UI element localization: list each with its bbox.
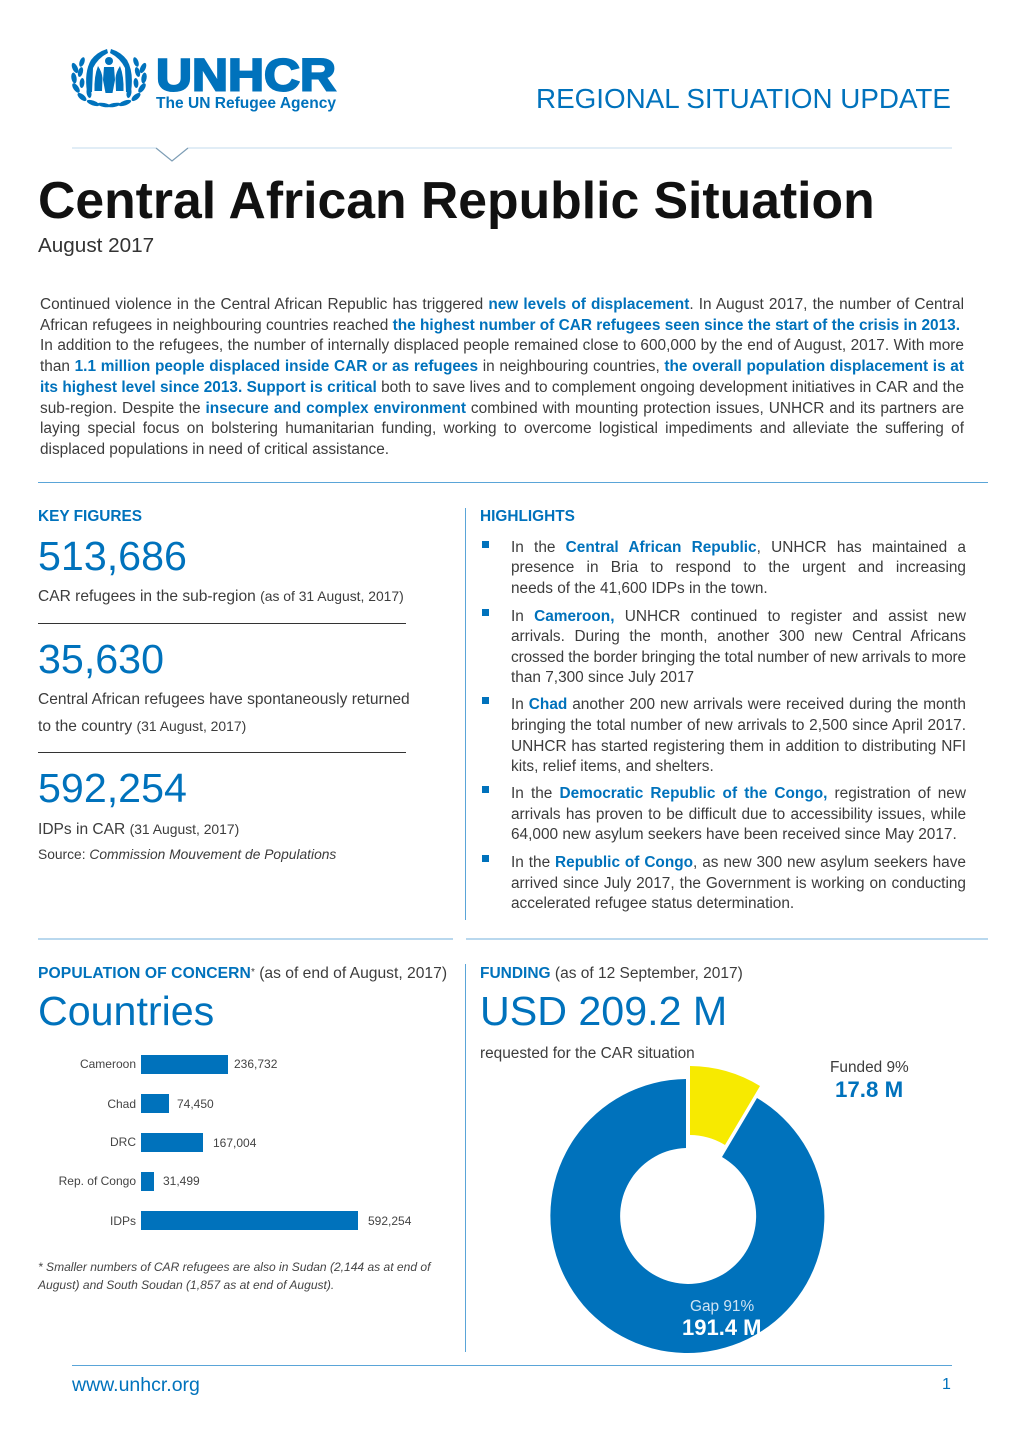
caption: refugees: CAR refugees in the sub-region (as of 31 August, 2017) xyxy=(38,588,404,605)
highlight: Republic of Congo xyxy=(511,854,966,912)
title: Central African Republic Situation xyxy=(38,171,875,229)
panel: key figures xyxy=(38,508,410,862)
document type label: REGIONAL SITUATION UPDATE xyxy=(536,83,951,114)
highlight: Central African Republic: In the Central African Republic, UNHCR has maintained a xyxy=(511,539,966,556)
intro paragraph: laying special focus on bolstering humanitarian funding, working to overcome logistical impediments and alleviate the suffering of xyxy=(40,420,964,437)
icon: UNHCR emblem xyxy=(70,49,148,108)
highlight: Cameroon: In Cameroon, UNHCR continued to register and assist new xyxy=(511,608,966,625)
intro paragraph: Continued violence in the Central African Republic has triggered new levels of displacement. In August 2017, the number of Central xyxy=(40,296,964,313)
highlight: Chad: In Chad another 200 new arrivals were received during the month xyxy=(511,696,966,713)
slice: funded xyxy=(690,1066,760,1145)
logo wordmark: UNHCR xyxy=(156,50,336,100)
intro paragraph xyxy=(40,296,964,458)
intro paragraph: its highest level since 2013. Support is critical both to save lives and to complement ongoing development initiatives in CAR and the xyxy=(40,379,964,396)
bullet: Central African Republic xyxy=(482,541,489,548)
footnote xyxy=(38,1260,432,1292)
caption: IDPs: IDPs in CAR (31 August, 2017) xyxy=(38,821,239,838)
panel: population of concern xyxy=(38,965,447,1034)
bar chart: population by country: 167,004 xyxy=(213,1136,256,1150)
bar chart: population by country xyxy=(59,1055,412,1230)
bar chart: population by country: 74,450 xyxy=(177,1097,214,1111)
highlight: DRC: 64,000 new asylum seekers have been received since May 2017. xyxy=(511,826,957,843)
logo tagline: The UN Refugee Agency xyxy=(156,95,336,112)
bar chart: population by country: 31,499 xyxy=(163,1174,200,1188)
bullet: Cameroon xyxy=(482,609,489,616)
label: funded xyxy=(830,1059,909,1102)
highlight: DRC: arrivals has proven to be difficult due to accessibility issues, while xyxy=(511,806,966,823)
label: funded: 17.8 M xyxy=(835,1077,903,1102)
heading: population of concern: POPULATION OF CONCERN* (as of end of August, 2017) xyxy=(38,965,447,982)
highlight: Central African Republic xyxy=(511,539,966,597)
bullet: DRC xyxy=(482,786,489,793)
highlight: Republic of Congo: arrived since July 2017, the Government is working on conducting xyxy=(511,875,966,892)
highlight: Cameroon: arrivals. During the month, another 300 new Central Africans xyxy=(511,628,966,645)
label: funded: Funded 9% xyxy=(830,1059,909,1076)
figure: refugees: 513,686 xyxy=(38,533,187,579)
figure: IDPs: 592,254 xyxy=(38,765,187,811)
label: gap: 191.4 M xyxy=(682,1315,762,1340)
highlight: DRC: In the Democratic Republic of the Congo, registration of new xyxy=(511,785,966,802)
panel: funding xyxy=(480,965,743,1062)
highlight: DRC xyxy=(511,785,966,843)
bar chart: population by country: DRC xyxy=(110,1135,136,1149)
highlight: Cameroon xyxy=(511,608,966,686)
intro paragraph: than 1.1 million people displaced inside CAR or as refugees in neighbouring countries, the overall population displacement is at xyxy=(40,358,964,375)
highlight: Cameroon: than 7,300 since July 2017 xyxy=(511,669,694,686)
label: gap xyxy=(682,1298,762,1340)
highlight: Republic of Congo: In the Republic of Congo, as new 300 new asylum seekers have xyxy=(511,854,966,871)
label: gap: Gap 91% xyxy=(690,1298,754,1315)
bar chart: population by country: Chad xyxy=(107,1097,136,1111)
donut chart: funding xyxy=(550,1066,824,1353)
bar chart: population by country: Cameroon xyxy=(80,1057,136,1071)
intro paragraph: African refugees in neighbouring countries reached the highest number of CAR refugees seen since the start of the crisis in 2013. xyxy=(40,317,960,334)
source note: Source: Commission Mouvement de Populations xyxy=(38,847,336,862)
footer: website: www.unhcr.org xyxy=(72,1374,200,1396)
intro paragraph: sub-region. Despite the insecure and complex environment combined with mounting protection issues, UNHCR and its partners are xyxy=(40,400,964,417)
intro paragraph: displaced populations in need of critical assistance. xyxy=(40,441,389,458)
heading: funding: FUNDING (as of 12 September, 2017) xyxy=(480,965,743,982)
figure: returnees: 35,630 xyxy=(38,636,164,682)
heading: key figures: KEY FIGURES xyxy=(38,508,142,525)
bar chart: population by country: 592,254 xyxy=(368,1214,411,1228)
logo: UNHCR xyxy=(71,49,337,112)
footer: page number: 1 xyxy=(942,1376,951,1393)
subheading: countries: Countries xyxy=(38,988,214,1034)
bar chart: population by country: 236,732 xyxy=(234,1057,277,1071)
highlight: Republic of Congo: accelerated refugee status determination. xyxy=(511,895,794,912)
highlight: Chad: kits, relief items, and shelters. xyxy=(511,758,714,775)
footnote: * Smaller numbers of CAR refugees are also in Sudan (2,144 as at end of xyxy=(38,1260,430,1274)
highlight: Chad: UNHCR has started registering them in addition to distributing NFI xyxy=(511,738,966,755)
highlight: Central African Republic: needs of the 41,600 IDPs in the town. xyxy=(511,580,768,597)
bullet: Republic of Congo xyxy=(482,855,489,862)
highlight: Cameroon: crossed the border bringing the total number of new arrivals to more xyxy=(511,649,966,666)
header rule with chevron xyxy=(72,147,952,162)
funding total: USD 209.2 M xyxy=(480,988,727,1034)
bar chart: population by country: Rep. of Congo xyxy=(59,1174,136,1188)
highlight: Chad xyxy=(511,696,966,775)
intro paragraph: In addition to the refugees, the number of internally displaced people remained close to 600,000 by the end of August, 2017. With more xyxy=(40,337,964,354)
caption: returnees date: to the country (31 August, 2017) xyxy=(38,718,246,735)
highlight: Chad: bringing the total number of new arrivals to 2,500 since April 2017. xyxy=(511,717,966,734)
bar chart: population by country: IDPs xyxy=(110,1214,136,1228)
date: August 2017 xyxy=(38,234,154,257)
funding caption: requested for the CAR situation xyxy=(480,1045,695,1062)
slice: gap xyxy=(550,1079,824,1353)
heading: highlights: HIGHLIGHTS xyxy=(480,508,575,525)
footnote: August) and South Soudan (1,857 as at end of August). xyxy=(38,1278,334,1292)
caption: returnees: Central African refugees have spontaneously returned xyxy=(38,691,410,708)
bullet: Chad xyxy=(482,697,489,704)
